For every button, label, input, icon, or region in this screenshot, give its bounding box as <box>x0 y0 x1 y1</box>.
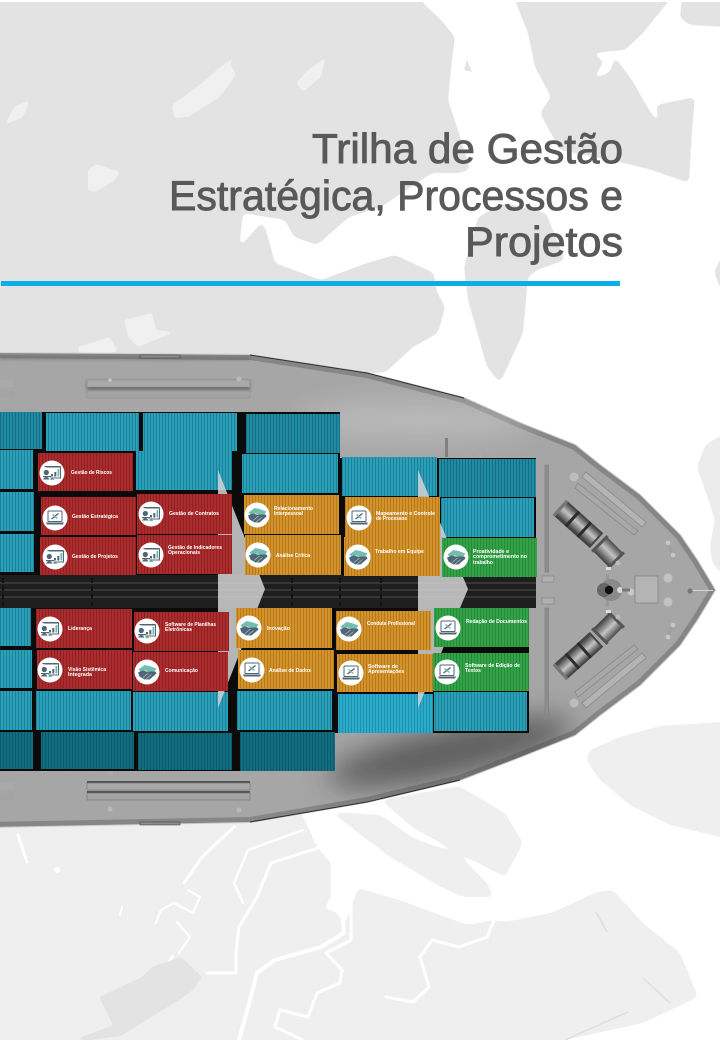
container: Software de Edição de Textos: Textos <box>465 668 481 674</box>
container: Software de Edição de Textos: Software de Edição de <box>465 663 520 669</box>
container: Software de Planilhas Eletrônicas: Eletrônicas <box>165 627 192 633</box>
direction arrow: second chevron <box>418 470 468 708</box>
container: Mapeamento e Controle de Processos <box>345 497 440 537</box>
container: Relacionamento Interpessoal: Relacionamento <box>274 506 314 512</box>
container: Análise de Dados: Análise de Dados <box>269 668 311 674</box>
container: Proatividade e comprometimento no trabalho <box>442 538 537 577</box>
container: Gestão de Indicadores Operacionais <box>137 535 232 574</box>
container: Mapeamento e Controle de Processos: Mapeamento e Controle <box>376 511 435 517</box>
container: Comunicação <box>133 652 228 691</box>
blue divider line <box>1 281 620 286</box>
container: Software de Apresentações <box>337 654 433 692</box>
container: Análise Crítica <box>245 535 341 575</box>
container: Análise Crítica: Análise Crítica <box>276 553 311 559</box>
container: Redação de Documentos: Redação de Documentos <box>466 619 527 625</box>
ship hull and deck <box>0 353 715 827</box>
container: Proatividade e comprometimento no trabalho: Proatividade e <box>473 549 509 555</box>
container: Proatividade e comprometimento no trabalho: comprometimento no <box>473 554 528 560</box>
container: Gestão de Projetos <box>40 537 136 575</box>
container: Análise de Dados <box>238 650 334 689</box>
container: Conduta Profissional <box>336 611 431 650</box>
container: Gestão Estratégica <box>41 497 136 535</box>
container: Gestão Estratégica: Gestão Estratégica <box>72 514 119 520</box>
title: Trilha de Gestão <box>312 125 623 172</box>
dark cargo hold and central corridor <box>0 412 536 771</box>
title: Projetos <box>465 218 623 265</box>
container: Software de Apresentações: Software de <box>368 664 398 670</box>
container: Relacionamento Interpessoal <box>244 495 339 534</box>
container: Software de Apresentações: Apresentações <box>368 669 404 675</box>
container: Gestão de Riscos <box>38 453 133 491</box>
title <box>169 125 623 265</box>
deck fixtures lower side <box>0 771 250 825</box>
container: Software de Edição de Textos <box>433 653 529 691</box>
deck fixtures <box>0 355 483 458</box>
container: Software de Planilhas Eletrônicas: Software de Planilhas <box>165 622 216 628</box>
container: Gestão de Contratos: Gestão de Contratos <box>169 511 219 517</box>
container: Redação de Documentos <box>434 608 529 647</box>
container: Conduta Profissional: Conduta Profissional <box>367 621 415 627</box>
container: Visão Sistêmica Integrada: Integrada <box>68 672 93 678</box>
direction arrow: first chevron <box>218 470 265 708</box>
container: Gestão de Indicadores Operacionais: Operacionais <box>168 550 200 556</box>
container: Relacionamento Interpessoal: Interpessoal <box>274 511 303 517</box>
container: Mapeamento e Controle de Processos: de Processos <box>376 516 407 522</box>
empty teal containers <box>0 412 536 771</box>
container: Software de Planilhas Eletrônicas <box>134 612 229 651</box>
container: Liderança: Liderança <box>68 626 93 632</box>
container: Visão Sistêmica Integrada: Visão Sistêmica <box>68 667 107 673</box>
container: Gestão de Indicadores Operacionais: Gestão de Indicadores <box>168 545 222 551</box>
container: Inovação: Inovação <box>267 626 291 632</box>
container: Liderança <box>36 609 132 648</box>
container: Trabalho em Equipe <box>344 537 440 576</box>
container: Gestão de Riscos: Gestão de Riscos <box>71 470 112 476</box>
container: Trabalho em Equipe: Trabalho em Equipe <box>375 549 424 555</box>
bow machinery <box>542 465 713 715</box>
container: Visão Sistêmica Integrada <box>37 650 132 689</box>
container: Inovação <box>236 608 332 648</box>
container: Comunicação: Comunicação <box>165 668 199 674</box>
container: Gestão de Projetos: Gestão de Projetos <box>72 554 118 560</box>
container: Gestão de Contratos <box>137 494 232 534</box>
title: Estratégica, Processos e <box>169 172 623 219</box>
container: Proatividade e comprometimento no trabalho: trabalho <box>473 560 494 566</box>
